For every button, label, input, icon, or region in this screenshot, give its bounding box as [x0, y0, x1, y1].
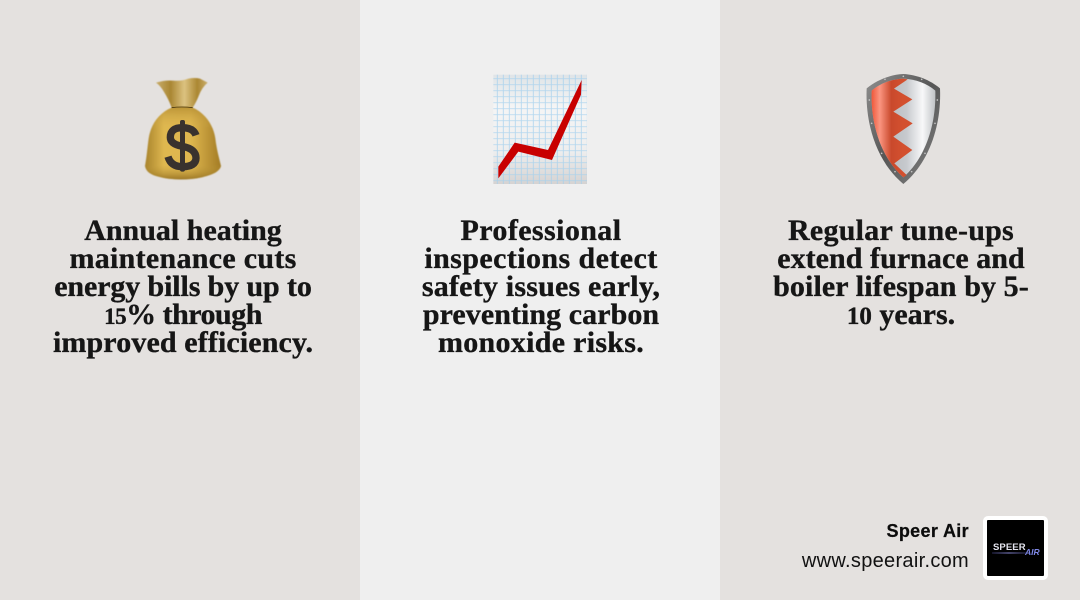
logo — [983, 516, 1048, 580]
text block: lifespan — [773, 214, 1029, 331]
text block: safety inspections: preventing carbon — [423, 298, 659, 331]
text block: safety inspections — [422, 214, 660, 359]
text block: safety inspections: Professional — [461, 214, 621, 247]
logo: SPEER — [993, 542, 1026, 553]
icon: chart with upward trend — [493, 74, 587, 184]
panel: centre background — [360, 0, 720, 600]
text block: safety inspections: inspections detect — [424, 242, 658, 275]
panel: right background — [720, 0, 1080, 600]
text block: energy bills — [53, 214, 313, 359]
text block: lifespan: boiler lifespan by 5- — [773, 270, 1029, 303]
text block: safety inspections: monoxide risks. — [438, 326, 644, 359]
icon: money bag — [144, 77, 222, 180]
text block: lifespan: 10 years. — [847, 298, 955, 331]
text block: energy bills: Annual heating — [84, 214, 282, 247]
text block: lifespan: Regular tune-ups — [788, 214, 1014, 247]
text block: lifespan: extend furnace and — [777, 242, 1025, 275]
brand name: Speer Air — [886, 521, 969, 541]
text block: safety inspections: safety issues early, — [422, 270, 660, 303]
panel: left background — [0, 0, 360, 600]
text block: energy bills: 15% through — [104, 298, 262, 331]
text block: energy bills: improved efficiency. — [53, 326, 313, 359]
text block: energy bills: energy bills by up to — [54, 270, 312, 303]
icon: shield — [866, 74, 940, 184]
logo: AIR — [1025, 547, 1040, 557]
website: www.speerair.com — [802, 550, 969, 572]
text block: energy bills: maintenance cuts — [69, 242, 297, 275]
